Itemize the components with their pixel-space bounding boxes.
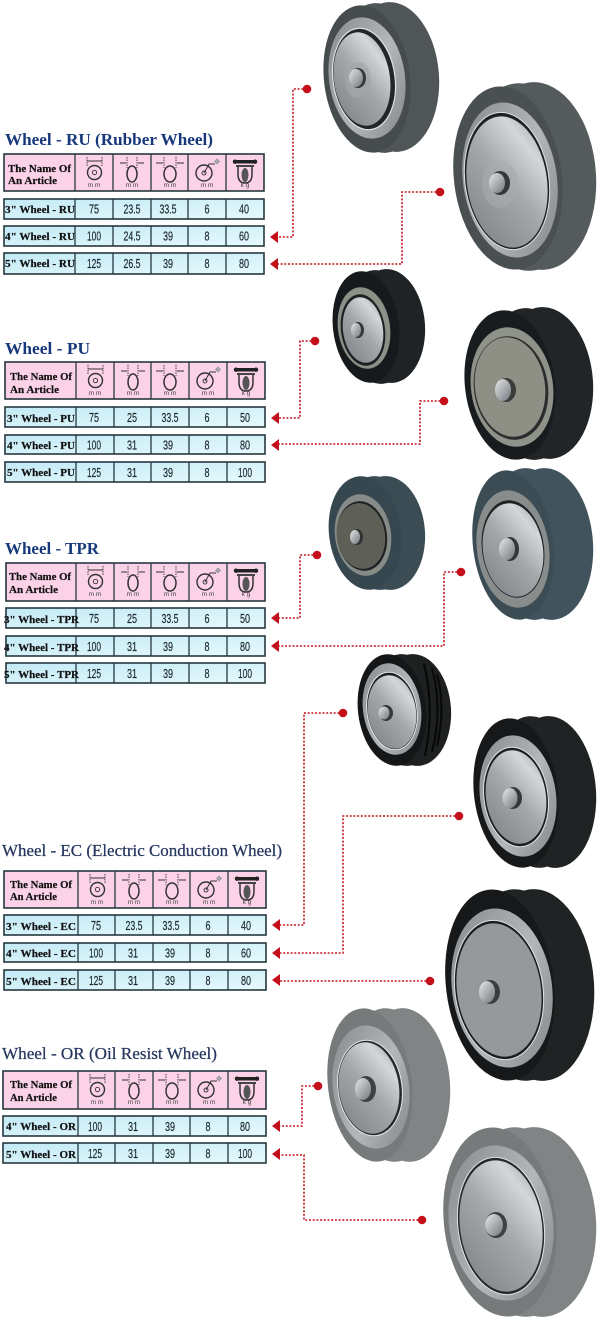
table row: 4 inch RU bbox=[4, 226, 264, 246]
table row: 3 inch PU: 25 bbox=[127, 411, 137, 425]
table row: 5 inch OR bbox=[3, 1143, 266, 1163]
table header: TPR: The Name Of bbox=[9, 572, 71, 583]
table header: OR: m m bbox=[203, 1099, 215, 1106]
table header: RU: The Name Of bbox=[8, 164, 72, 175]
table row: 5 inch TPR bbox=[4, 663, 265, 683]
table row: 5 inch PU: 39 bbox=[163, 466, 173, 480]
table row: 5 inch TPR: 125 bbox=[87, 667, 101, 681]
table row: 5 inch RU: 26.5 bbox=[124, 257, 141, 271]
table row: 4 inch PU: 4" Wheel - PU bbox=[7, 440, 75, 452]
table row: 4 inch PU: 80 bbox=[240, 438, 250, 452]
table header: PU: m m bbox=[164, 390, 176, 397]
connector: TPR 3 inch bbox=[271, 551, 321, 624]
table row: 4 inch EC: 31 bbox=[128, 946, 138, 960]
table header: RU: m m bbox=[164, 182, 176, 189]
table header: OR: An Article bbox=[10, 1093, 57, 1104]
table row: 5 inch EC: 8 bbox=[206, 974, 211, 988]
table row: 4 inch OR: 8 bbox=[206, 1120, 211, 1134]
table row: 4 inch OR: 80 bbox=[240, 1120, 250, 1134]
table row: 3 inch RU: 75 bbox=[89, 202, 99, 216]
wheel: OR 5 inch bbox=[433, 1121, 600, 1321]
table row: 5 inch EC: 80 bbox=[241, 974, 251, 988]
table row: 5 inch RU: 80 bbox=[239, 257, 249, 271]
table header: TPR: m m bbox=[89, 591, 101, 598]
table row: 5 inch EC bbox=[4, 970, 266, 990]
connector: EC 5 inch bbox=[272, 974, 434, 986]
table row: 4 inch RU: 4" Wheel - RU bbox=[5, 231, 75, 243]
table row: 4 inch OR: 39 bbox=[165, 1120, 175, 1134]
table header: EC: m m bbox=[203, 899, 215, 906]
table row: 5 inch OR: 5" Wheel - OR bbox=[6, 1149, 77, 1161]
table row: 3 inch EC: 75 bbox=[91, 919, 101, 933]
connector: PU 3 inch bbox=[271, 337, 319, 424]
table row: 4 inch TPR: 39 bbox=[163, 640, 173, 654]
wheel: RU 3 inch bbox=[315, 0, 444, 158]
table row: 4 inch EC: 8 bbox=[206, 946, 211, 960]
table row: 3 inch EC: 40 bbox=[241, 919, 251, 933]
table header: EC: m m bbox=[91, 899, 103, 906]
connector: OR 5 inch bbox=[272, 1148, 426, 1224]
table row: 5 inch PU: 125 bbox=[87, 466, 101, 480]
table row: 5 inch OR: 31 bbox=[128, 1147, 138, 1161]
table header: RU: k g bbox=[241, 182, 250, 189]
section: RU wheel table bbox=[4, 130, 264, 274]
table row: 3 inch TPR: 50 bbox=[240, 612, 250, 626]
table row: 5 inch RU: 39 bbox=[163, 257, 173, 271]
table row: 4 inch RU: 39 bbox=[163, 230, 173, 244]
table row: 4 inch PU bbox=[5, 435, 265, 454]
table row: 4 inch PU: 100 bbox=[87, 438, 101, 452]
connector: TPR 4 inch bbox=[271, 568, 465, 652]
table row: 3 inch PU: 50 bbox=[240, 411, 250, 425]
table header: PU: k g bbox=[242, 390, 251, 397]
table row: 4 inch TPR bbox=[4, 636, 265, 656]
table row: 5 inch TPR: 5" Wheel - TPR bbox=[4, 669, 80, 681]
wheel: TPR 3 inch bbox=[322, 472, 429, 594]
table row: 5 inch EC: 31 bbox=[128, 974, 138, 988]
table row: 3 inch RU: 23.5 bbox=[124, 202, 141, 216]
table header: PU: m m bbox=[202, 390, 214, 397]
table row: 5 inch PU: 5" Wheel - PU bbox=[7, 467, 75, 479]
title: Wheel TPR: Wheel - TPR bbox=[5, 539, 100, 558]
table row: 4 inch RU: 24.5 bbox=[124, 230, 141, 244]
table row: 4 inch OR: 100 bbox=[88, 1120, 102, 1134]
table row: 4 inch EC: 100 bbox=[89, 946, 103, 960]
table header: EC bbox=[4, 871, 266, 908]
section: OR wheel table bbox=[2, 1044, 266, 1163]
table row: 3 inch PU: 3" Wheel - PU bbox=[7, 413, 75, 425]
wheel: TPR 5 inch bbox=[464, 464, 598, 624]
section: PU wheel table bbox=[5, 339, 265, 482]
table header: PU: An Article bbox=[10, 385, 59, 396]
table row: 4 inch RU: 8 bbox=[204, 230, 210, 244]
table row: 3 inch RU: 3" Wheel - RU bbox=[5, 204, 75, 216]
table row: 3 inch TPR: 3" Wheel - TPR bbox=[4, 614, 80, 626]
table header: OR: k g bbox=[243, 1099, 252, 1106]
title: Wheel EC: Wheel - EC (Electric Conduction Wheel) bbox=[2, 841, 282, 860]
table row: 3 inch TPR bbox=[4, 608, 265, 628]
table row: 3 inch PU: 75 bbox=[89, 411, 99, 425]
table row: 4 inch OR bbox=[3, 1116, 266, 1136]
wheel: EC 4 inch bbox=[465, 712, 600, 873]
table header: EC: m m bbox=[166, 899, 178, 906]
table header: RU: m m bbox=[126, 182, 138, 189]
table row: 3 inch RU: 6 bbox=[204, 202, 210, 216]
table header: RU bbox=[4, 154, 264, 191]
table row: 5 inch EC: 5" Wheel - EC bbox=[6, 976, 76, 988]
table row: 5 inch TPR: 39 bbox=[163, 667, 173, 681]
table row: 4 inch TPR: 80 bbox=[240, 640, 250, 654]
table row: 3 inch RU bbox=[4, 199, 264, 219]
table row: 4 inch EC: 60 bbox=[241, 946, 251, 960]
table header: OR: The Name Of bbox=[10, 1080, 72, 1091]
table row: 4 inch RU: 100 bbox=[87, 230, 101, 244]
table header: PU bbox=[5, 362, 265, 399]
table row: 4 inch PU: 31 bbox=[127, 438, 137, 452]
wheel: EC 5 inch bbox=[435, 883, 600, 1087]
table row: 3 inch EC: 6 bbox=[206, 919, 211, 933]
table row: 4 inch PU: 8 bbox=[204, 438, 210, 452]
table row: 5 inch PU: 31 bbox=[127, 466, 137, 480]
title: Wheel RU: Wheel - RU (Rubber Wheel) bbox=[5, 130, 213, 149]
table row: 3 inch EC: 23.5 bbox=[126, 919, 143, 933]
table row: 5 inch PU: 8 bbox=[204, 466, 210, 480]
table header: TPR bbox=[6, 563, 265, 601]
table row: 5 inch RU: 125 bbox=[87, 257, 101, 271]
table row: 5 inch TPR: 31 bbox=[127, 667, 137, 681]
table row: 4 inch OR: 31 bbox=[128, 1120, 138, 1134]
table row: 4 inch EC: 39 bbox=[165, 946, 175, 960]
table row: 3 inch RU: 33.5 bbox=[160, 202, 177, 216]
table header: RU: m m bbox=[201, 182, 213, 189]
table header: TPR: k g bbox=[242, 591, 251, 598]
table header: PU: The Name Of bbox=[10, 372, 72, 383]
connector: EC 4 inch bbox=[272, 812, 463, 959]
table row: 4 inch TPR: 31 bbox=[127, 640, 137, 654]
table row: 5 inch TPR: 8 bbox=[204, 667, 210, 681]
table header: TPR: m m bbox=[202, 591, 214, 598]
table row: 5 inch OR: 8 bbox=[206, 1147, 211, 1161]
table header: EC: An Article bbox=[10, 892, 57, 903]
table row: 4 inch EC: 4" Wheel - EC bbox=[6, 948, 76, 960]
table header: PU: m m bbox=[127, 390, 139, 397]
table header: RU: An Article bbox=[8, 176, 57, 187]
table row: 4 inch EC bbox=[4, 943, 266, 962]
table row: 3 inch TPR: 6 bbox=[204, 612, 210, 626]
table row: 5 inch RU: 8 bbox=[204, 257, 210, 271]
table row: 4 inch RU: 60 bbox=[239, 230, 249, 244]
table row: 4 inch OR: 4" Wheel - OR bbox=[6, 1121, 77, 1133]
table header: EC: The Name Of bbox=[10, 880, 72, 891]
table row: 3 inch PU: 33.5 bbox=[162, 411, 179, 425]
table header: EC: k g bbox=[243, 899, 252, 906]
table header: OR: m m bbox=[128, 1099, 140, 1106]
table header: TPR: m m bbox=[164, 591, 176, 598]
connector: RU 5 inch bbox=[270, 188, 444, 270]
table row: 3 inch PU: 6 bbox=[204, 411, 210, 425]
table row: 3 inch RU: 40 bbox=[239, 202, 249, 216]
table row: 4 inch TPR: 100 bbox=[87, 640, 101, 654]
table header: EC: m m bbox=[128, 899, 140, 906]
table row: 5 inch EC: 39 bbox=[165, 974, 175, 988]
table row: 5 inch OR: 39 bbox=[165, 1147, 175, 1161]
wheel: OR 4 inch bbox=[319, 1003, 455, 1167]
table header: PU: m m bbox=[89, 390, 101, 397]
wheel: PU 3 inch bbox=[326, 267, 429, 387]
table row: 5 inch RU: 5" Wheel - RU bbox=[5, 258, 75, 270]
wheel: EC 3 inch bbox=[351, 650, 455, 770]
table row: 4 inch PU: 39 bbox=[163, 438, 173, 452]
table row: 3 inch EC: 3" Wheel - EC bbox=[6, 921, 76, 933]
table row: 5 inch PU bbox=[5, 462, 265, 482]
table row: 3 inch TPR: 25 bbox=[127, 612, 137, 626]
wheel: RU 5 inch bbox=[443, 78, 600, 276]
table header: TPR: m m bbox=[127, 591, 139, 598]
section: TPR wheel table bbox=[4, 539, 265, 683]
connector: RU 4 inch bbox=[270, 85, 311, 243]
table header: OR: m m bbox=[166, 1099, 178, 1106]
section: EC wheel table bbox=[2, 841, 282, 990]
table row: 5 inch PU: 100 bbox=[238, 466, 252, 480]
table header: OR bbox=[3, 1071, 266, 1109]
table row: 3 inch TPR: 75 bbox=[89, 612, 99, 626]
table row: 4 inch TPR: 8 bbox=[204, 640, 210, 654]
table row: 3 inch EC: 33.5 bbox=[162, 919, 180, 933]
table header: TPR: An Article bbox=[9, 585, 58, 596]
table row: 4 inch TPR: 4" Wheel - TPR bbox=[4, 642, 80, 654]
connector: EC 3 inch bbox=[272, 709, 347, 931]
title: Wheel OR: Wheel - OR (Oil Resist Wheel) bbox=[2, 1044, 217, 1063]
table row: 5 inch TPR: 100 bbox=[238, 667, 252, 681]
table header: RU: m m bbox=[88, 182, 100, 189]
connector: OR 4 inch bbox=[272, 1082, 322, 1132]
table row: 5 inch RU bbox=[4, 253, 264, 274]
table header: OR: m m bbox=[91, 1099, 103, 1106]
wheel: PU 5 inch bbox=[456, 304, 598, 465]
table row: 3 inch PU bbox=[5, 407, 265, 427]
table row: 5 inch EC: 125 bbox=[89, 974, 103, 988]
title: Wheel PU: Wheel - PU bbox=[5, 339, 90, 358]
table row: 3 inch TPR: 33.5 bbox=[162, 612, 179, 626]
connector: PU 4 inch bbox=[271, 397, 448, 451]
table row: 5 inch OR: 125 bbox=[88, 1147, 102, 1161]
table row: 5 inch OR: 100 bbox=[238, 1147, 252, 1161]
table row: 3 inch EC bbox=[4, 915, 266, 935]
